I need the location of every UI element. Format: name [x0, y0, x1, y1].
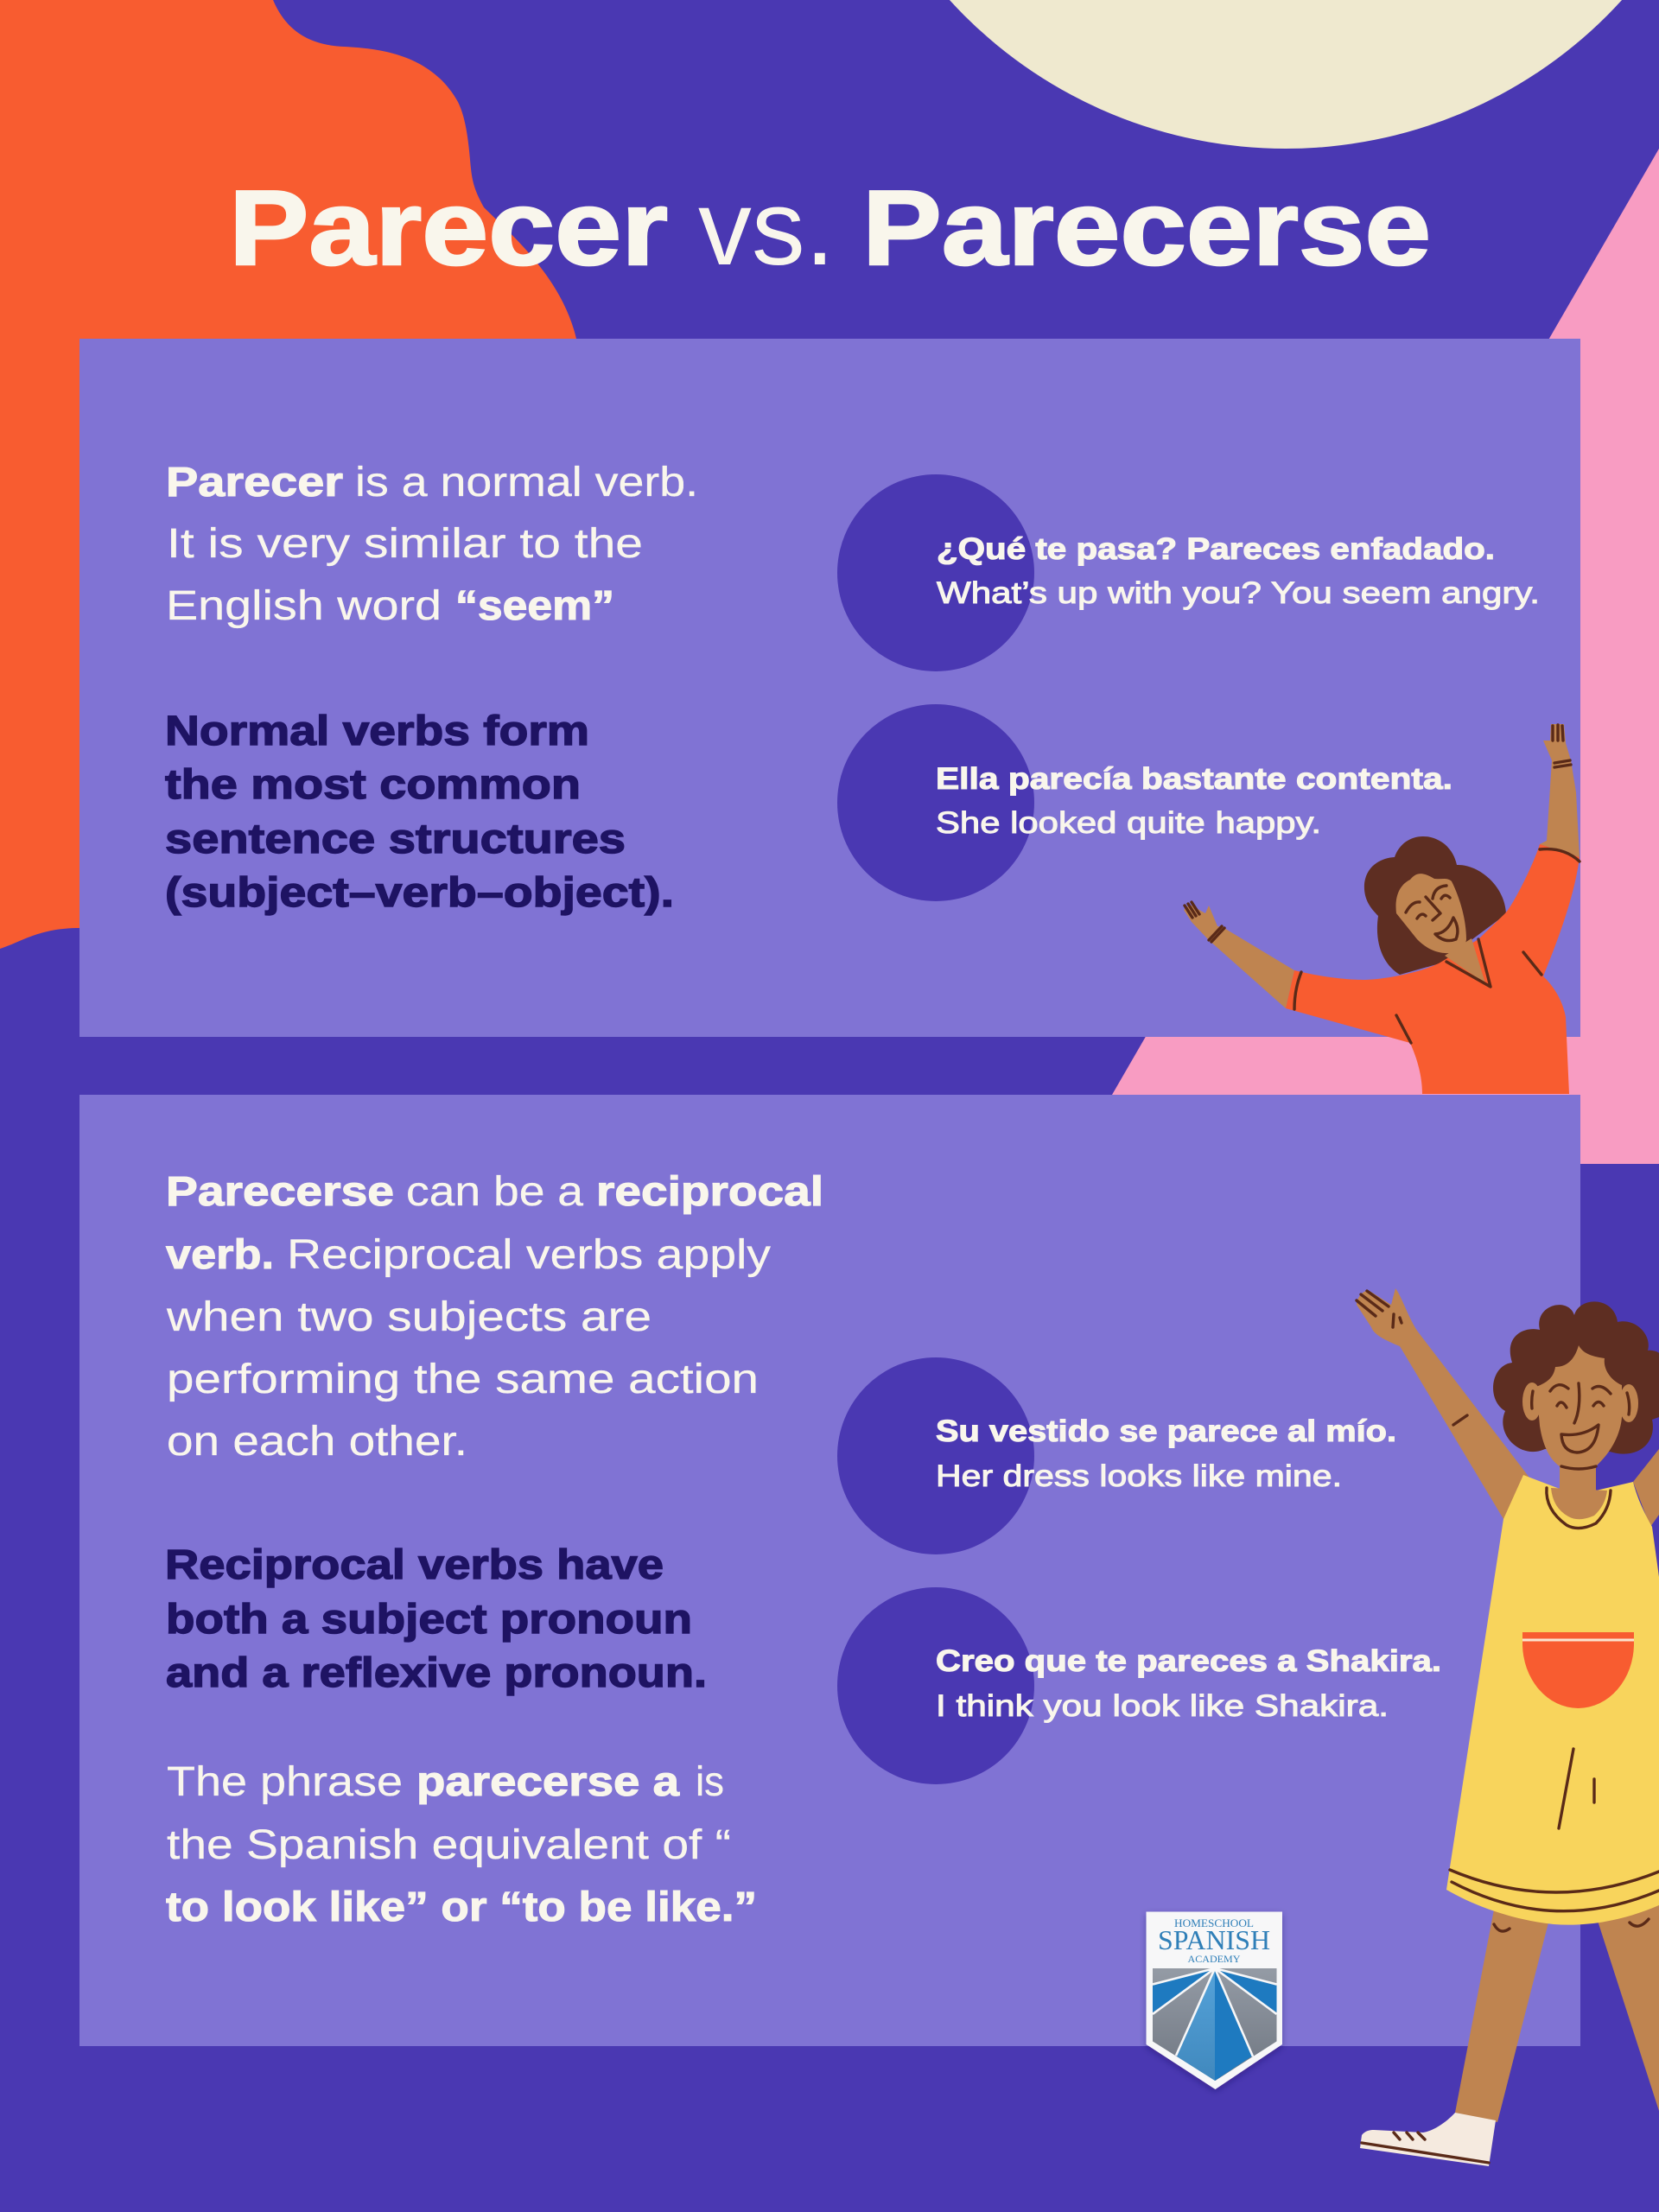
shirt [1286, 844, 1580, 1094]
example 2: circle and sentences: She looked quite happy. [936, 806, 1321, 840]
text block: normal verbs note: Normal verbs form [165, 709, 589, 754]
text block: parecer definition: Parecer [166, 460, 343, 505]
dress [1446, 1475, 1659, 1925]
logo: Homeschool Spanish Academy shield: HOMESCHOOL [1174, 1916, 1254, 1929]
text block: parecer definition: is a normal verb. [355, 460, 698, 505]
front leg [1455, 1910, 1548, 2122]
text block: parecerse a phrase [166, 1759, 757, 1930]
left arm [1184, 905, 1294, 1008]
back leg [1598, 1905, 1659, 2111]
right arm [1540, 724, 1580, 857]
text block: parecer definition: “seem” [455, 583, 614, 629]
text block: parecerse definition: verb. [166, 1232, 274, 1278]
illustration: woman in orange shirt [1184, 724, 1580, 1094]
decorative cream circle [831, 0, 1659, 149]
decorative orange blob [0, 0, 576, 949]
text block: parecer definition: English word [166, 583, 442, 629]
text block: parecerse definition: when two subjects are [166, 1294, 652, 1340]
illustration: woman in yellow dress [1357, 1288, 1659, 2166]
example 4: circle and sentences: I think you look like Shakira. [936, 1689, 1389, 1723]
text block: parecerse a phrase: parecerse a [416, 1759, 679, 1805]
text block: parecerse definition: on each other. [167, 1419, 467, 1465]
text block: parecerse a phrase: to look like” or “to be like.” [166, 1885, 757, 1930]
title: vs. [698, 169, 835, 288]
example 4: circle and sentences [837, 1587, 1441, 1784]
text block: normal verbs note: sentence structures [165, 817, 626, 862]
face and neck [1536, 1345, 1622, 1503]
title [229, 169, 1431, 288]
text block: parecerse definition: Reciprocal verbs apply [287, 1232, 771, 1278]
text block: normal verbs note: (subject–verb–object). [165, 870, 674, 916]
title: Parecerse [862, 169, 1431, 288]
neck [1445, 938, 1485, 983]
text block: parecerse definition: performing the same action [167, 1357, 759, 1402]
text block: parecerse a phrase: the Spanish equivalent of “ [167, 1822, 731, 1868]
example 3: circle and sentences [837, 1357, 1396, 1554]
text block: reciprocal verbs note [165, 1542, 707, 1696]
dress neck skin [1551, 1488, 1607, 1519]
face [1396, 874, 1466, 953]
text block: parecerse definition: can be a [406, 1169, 583, 1215]
pocket [1522, 1632, 1634, 1708]
hair [1493, 1301, 1659, 1454]
text block: reciprocal verbs note: Reciprocal verbs have [165, 1542, 664, 1588]
example 3: circle and sentences: Her dress looks like mine. [936, 1459, 1342, 1493]
text block: parecerse a phrase: The phrase [167, 1759, 403, 1805]
text block: parecerse a phrase: is [696, 1759, 724, 1805]
text block: normal verbs note [165, 709, 674, 916]
raised right arm [1633, 1449, 1659, 1527]
text block: parecerse definition: Parecerse [166, 1169, 394, 1215]
example 3: circle and sentences: Su vestido se parece al mío. [936, 1414, 1396, 1448]
right ear [1619, 1384, 1638, 1422]
panel: parecer background [79, 339, 1580, 1037]
text block: parecer definition: It is very similar to the [167, 521, 643, 567]
logo: Homeschool Spanish Academy shield: SPANISH [1158, 1924, 1270, 1955]
example 2: circle and sentences: Ella parecía bastante contenta. [936, 762, 1452, 796]
text block: parecerse definition [166, 1169, 823, 1465]
logo: Homeschool Spanish Academy shield [1146, 1911, 1282, 2089]
title: Parecer [229, 169, 668, 288]
figure lines [1357, 1291, 1659, 1931]
example 4: circle and sentences: Creo que te pareces a Shakira. [936, 1644, 1441, 1678]
text block: parecer definition [166, 460, 698, 629]
shoe [1360, 2113, 1496, 2166]
left ear [1522, 1382, 1541, 1421]
panel: parecerse background [79, 1095, 1580, 2046]
decorative pink shape [1112, 149, 1659, 1164]
hair [1364, 836, 1506, 975]
text block: reciprocal verbs note: and a reflexive pronoun. [166, 1650, 707, 1696]
text block: normal verbs note: the most common [165, 762, 581, 808]
raised left arm [1357, 1288, 1529, 1519]
example 1: circle and sentences [837, 474, 1540, 671]
face lines [1185, 725, 1580, 1043]
text block: reciprocal verbs note: both a subject pronoun [166, 1597, 692, 1643]
logo: Homeschool Spanish Academy shield: ACADEMY [1187, 1953, 1241, 1965]
example 2: circle and sentences [837, 704, 1452, 901]
example 1: circle and sentences: ¿Qué te pasa? Pareces enfadado. [937, 532, 1495, 566]
text block: parecerse definition: reciprocal [596, 1169, 823, 1215]
example 1: circle and sentences: What’s up with you? You seem angry. [937, 576, 1540, 610]
